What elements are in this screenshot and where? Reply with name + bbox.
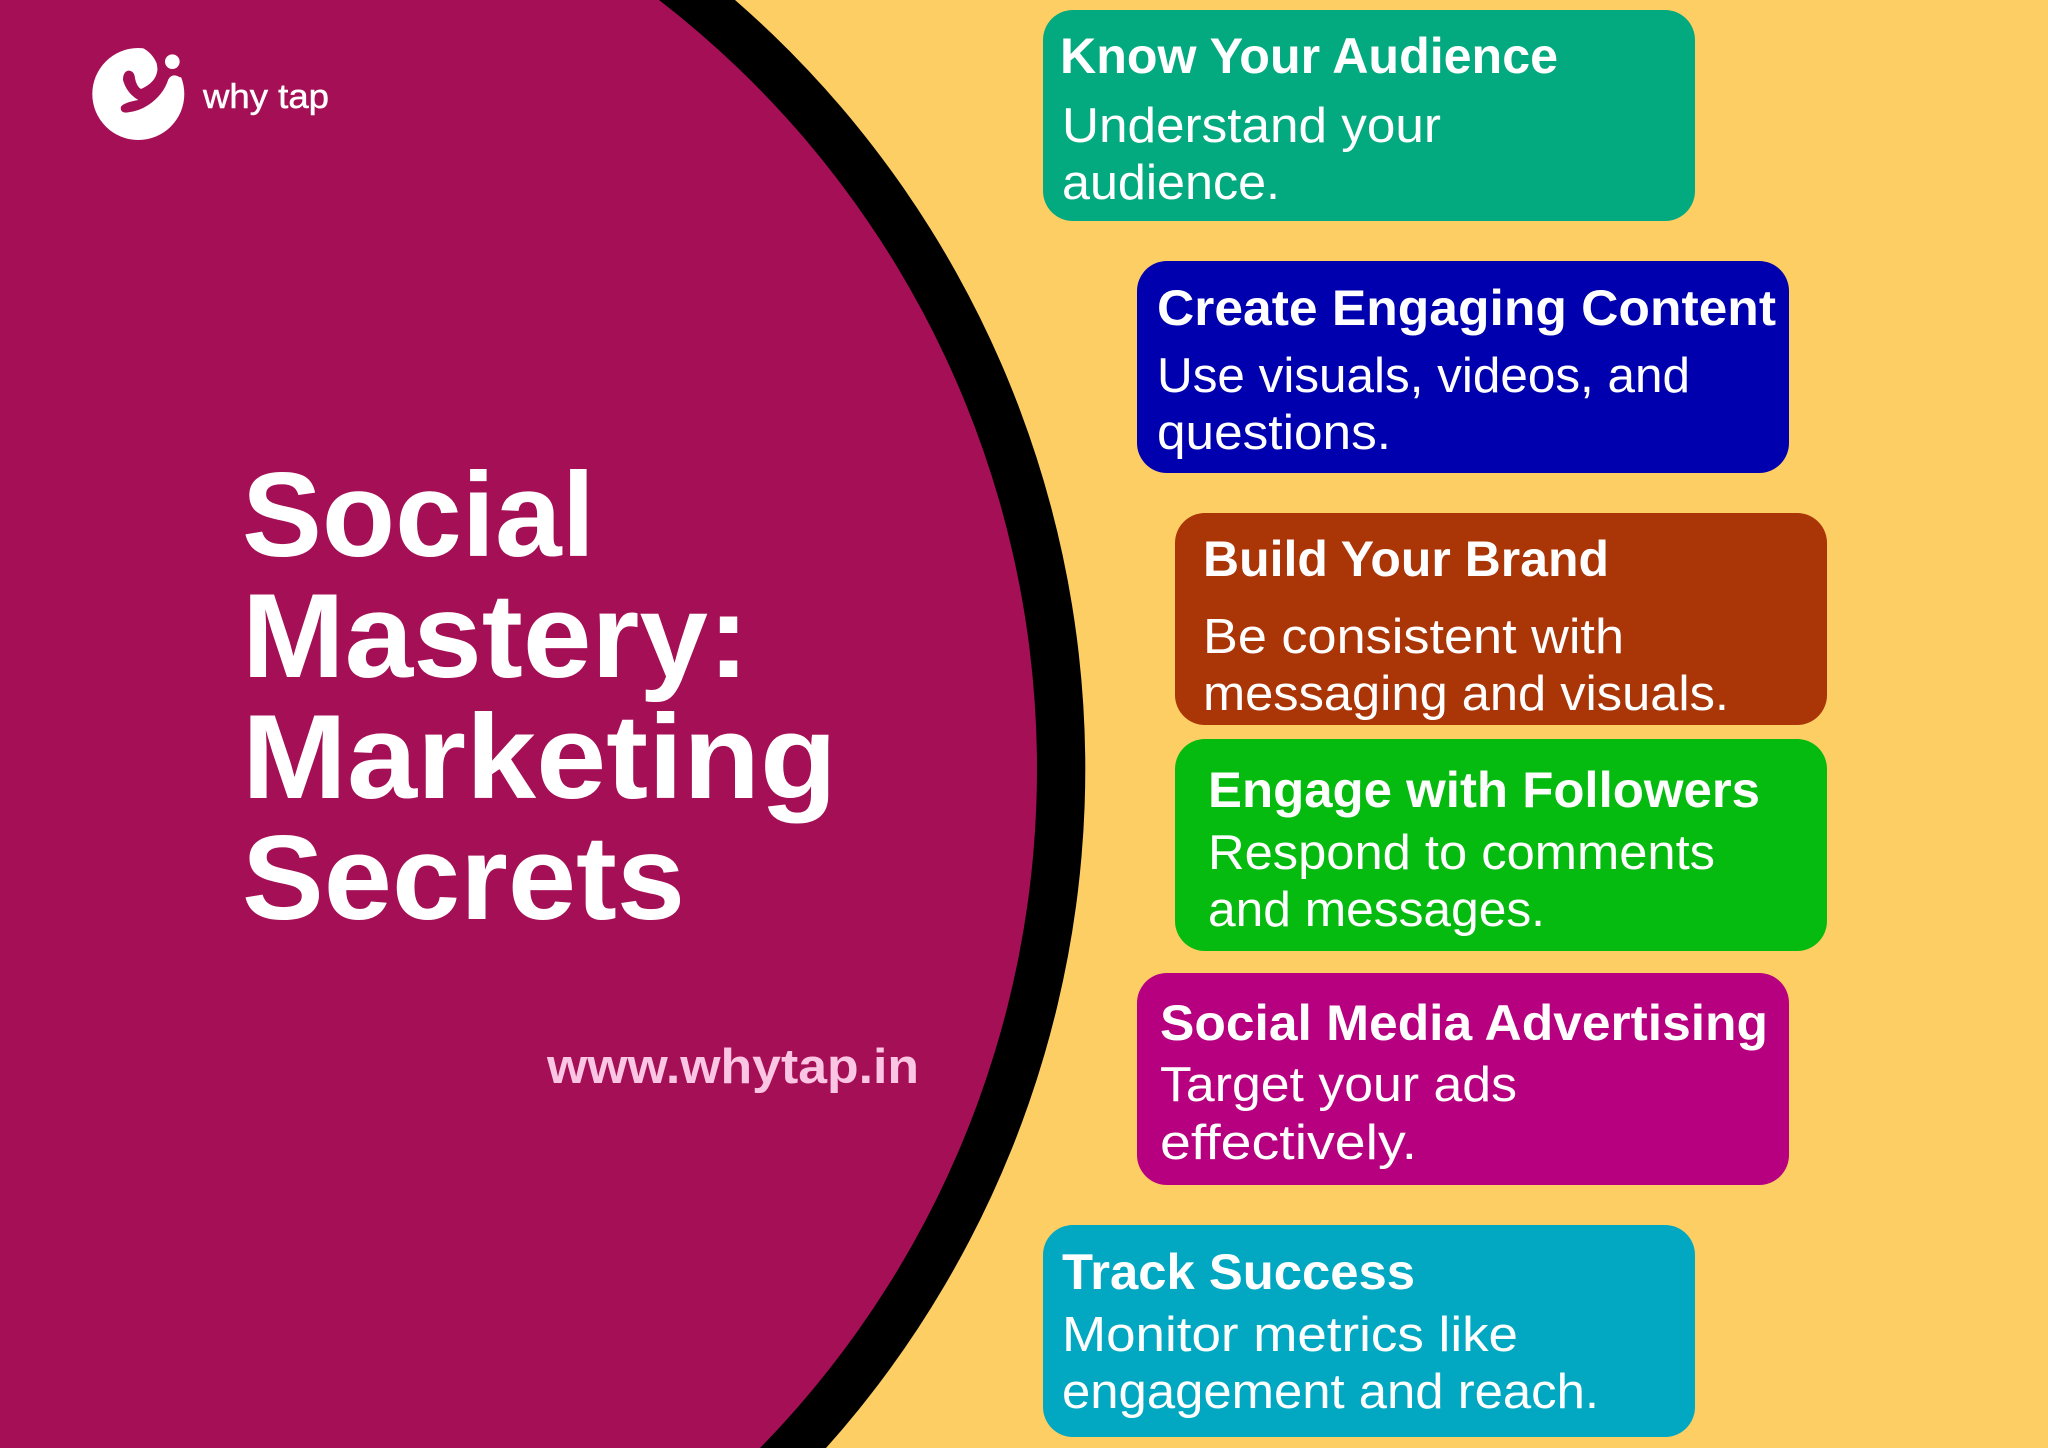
panel: social media advertising: [1137, 973, 1789, 1185]
logo wordmark: why tap: [202, 78, 329, 116]
main title: Social: [242, 448, 595, 582]
description: [1203, 610, 1729, 721]
maroon circle panel: [0, 0, 1037, 1448]
black arc ring: [0, 0, 1085, 1448]
panel: engage with followers: [1175, 739, 1827, 951]
main title: Marketing: [242, 690, 837, 824]
heading: Build Your Brand: [1203, 531, 1609, 587]
heading: Create Engaging Content: [1157, 280, 1776, 336]
main title: [242, 448, 837, 945]
description: Use visuals, videos, and: [1157, 349, 1690, 403]
description: effectively.: [1160, 1116, 1417, 1170]
website url: www.whytap.in: [546, 1040, 919, 1094]
logo icon: [92, 47, 195, 140]
description: [1160, 1058, 1517, 1170]
panel: track success: [1043, 1225, 1695, 1437]
description: [1062, 1308, 1599, 1419]
description: Be consistent with: [1203, 610, 1624, 664]
description: [1157, 349, 1690, 460]
panel: build your brand: [1175, 513, 1827, 725]
description: Monitor metrics like: [1062, 1308, 1518, 1362]
description: [1208, 826, 1715, 937]
logo: why tap: [92, 47, 329, 140]
heading: Engage with Followers: [1208, 762, 1760, 818]
description: Target your ads: [1160, 1058, 1517, 1112]
heading: Know Your Audience: [1060, 28, 1558, 84]
panel: know your audience: [1043, 10, 1695, 221]
description: Respond to comments: [1208, 826, 1715, 880]
description: [1062, 99, 1441, 210]
description: Understand your: [1062, 99, 1441, 153]
main title: Secrets: [242, 811, 685, 945]
description: and messages.: [1208, 883, 1545, 937]
panel: create engaging content: [1137, 261, 1789, 473]
heading: Track Success: [1062, 1244, 1415, 1300]
description: engagement and reach.: [1062, 1365, 1599, 1419]
main title: Mastery:: [242, 569, 749, 703]
heading: Social Media Advertising: [1160, 995, 1768, 1051]
description: audience.: [1062, 156, 1280, 210]
description: messaging and visuals.: [1203, 667, 1729, 721]
description: questions.: [1157, 406, 1391, 460]
